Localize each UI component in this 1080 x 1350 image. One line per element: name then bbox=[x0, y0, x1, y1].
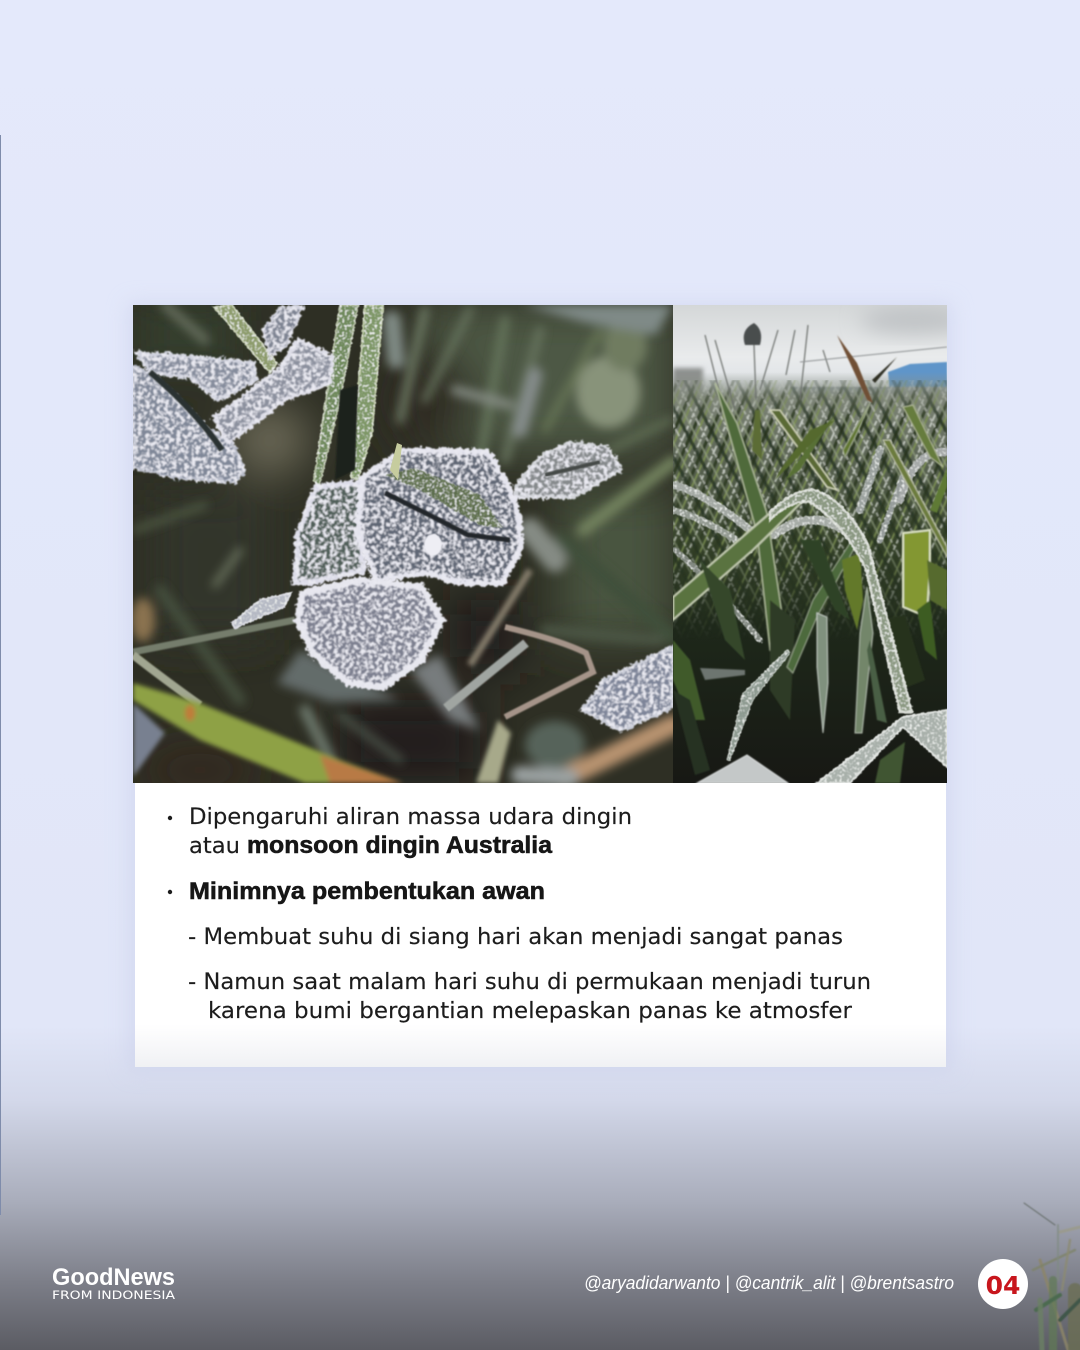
photo: frosted grass field bbox=[673, 305, 970, 783]
foreground green blade bbox=[133, 683, 511, 783]
seed head and thin stalks bbox=[705, 323, 947, 410]
frost arch blade bbox=[770, 490, 912, 712]
card shadow bbox=[127, 302, 953, 1072]
decorative grass bottom right bbox=[1024, 1203, 1080, 1350]
frosted leaves top left bbox=[263, 307, 302, 357]
blurred background stems bbox=[131, 305, 673, 778]
bullet 1 text: monsoon dingin Australia bbox=[247, 832, 553, 859]
sub-point 2 bbox=[188, 969, 871, 1024]
sub-point 2: karena bumi bergantian melepaskan panas ke atmosfer bbox=[208, 998, 853, 1024]
page number badge: 04 bbox=[986, 1271, 1020, 1300]
logo: GoodNews from Indonesia: GoodNews bbox=[52, 1264, 175, 1291]
logo: GoodNews from Indonesia: FROM INDONESIA bbox=[52, 1288, 175, 1302]
bullet 1 text: atau bbox=[189, 833, 240, 859]
text card bbox=[135, 783, 946, 1067]
bullet 1 text bbox=[168, 804, 632, 859]
photo credits: @aryadidarwanto | @cantrik_alit | @brentsastro bbox=[584, 1273, 954, 1293]
sub-point 2: - Namun saat malam hari suhu di permukaan menjadi turun bbox=[188, 969, 871, 995]
bullet 1 text: Dipengaruhi aliran massa udara dingin bbox=[189, 804, 632, 830]
page number badge bbox=[978, 1259, 1028, 1309]
main frost leaf cluster bbox=[295, 443, 521, 687]
bullet 2 text: Minimnya pembentukan awan bbox=[189, 878, 545, 905]
hazy frost band bbox=[673, 450, 945, 640]
grass blades frosted bbox=[214, 305, 277, 373]
photo: frosted leaves close-up bbox=[131, 305, 673, 790]
sub-point 1: - Membuat suhu di siang hari akan menjadi sangat panas bbox=[188, 924, 843, 950]
lower frost blades bbox=[727, 650, 790, 760]
sharper stems bbox=[133, 570, 593, 717]
frosted leaf right bbox=[516, 443, 621, 497]
green blades bbox=[673, 335, 947, 775]
frosted leaf lower right bbox=[583, 647, 673, 730]
dense grass texture bbox=[673, 380, 947, 650]
